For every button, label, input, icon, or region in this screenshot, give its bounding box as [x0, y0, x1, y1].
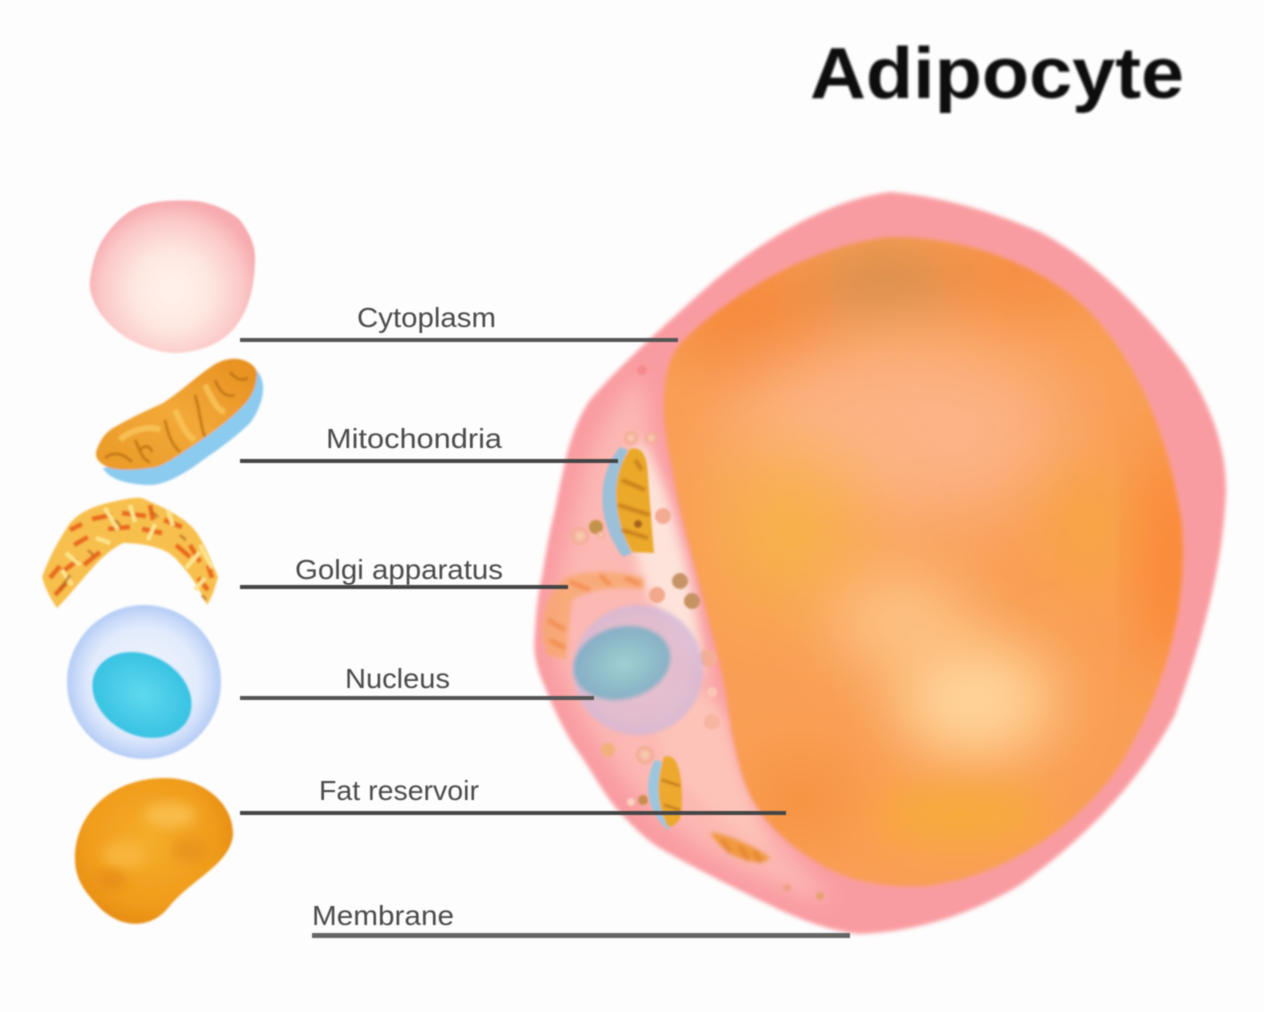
label: nucleus — [240, 663, 594, 700]
cell golgi apparatus — [542, 572, 644, 660]
label: golgi apparatus: Golgi apparatus — [295, 554, 503, 585]
label: cytoplasm: Cytoplasm — [357, 302, 496, 333]
title: Adipocyte — [810, 34, 1184, 114]
icon: fat droplet — [75, 778, 233, 924]
label: golgi apparatus — [240, 554, 568, 589]
cell mitochondrion upper — [602, 447, 654, 557]
label: nucleus: Nucleus — [345, 663, 450, 694]
cell nucleus — [566, 605, 703, 735]
label: mitochondria — [240, 423, 618, 463]
label: fat reservoir — [240, 775, 786, 815]
fat reservoir — [650, 225, 1200, 895]
icon: mitochondrion — [96, 359, 263, 485]
cytoplasm pink region — [553, 375, 835, 902]
cell mitochondrion bottom — [710, 832, 770, 863]
label: membrane: Membrane — [312, 900, 454, 931]
small vesicles — [571, 365, 824, 900]
icon: nucleus — [67, 605, 221, 759]
label: cytoplasm — [240, 302, 678, 342]
main cell — [534, 192, 1226, 934]
icon: cytoplasm sphere — [90, 200, 255, 353]
icon: golgi apparatus — [42, 498, 218, 608]
label: mitochondria: Mitochondria — [326, 423, 502, 454]
cell membrane and outer cytoplasm — [534, 192, 1226, 934]
label: membrane — [312, 900, 850, 938]
label: fat reservoir: Fat reservoir — [319, 775, 479, 806]
cell mitochondrion lower — [648, 756, 682, 830]
cytoplasm pale region — [627, 440, 705, 680]
